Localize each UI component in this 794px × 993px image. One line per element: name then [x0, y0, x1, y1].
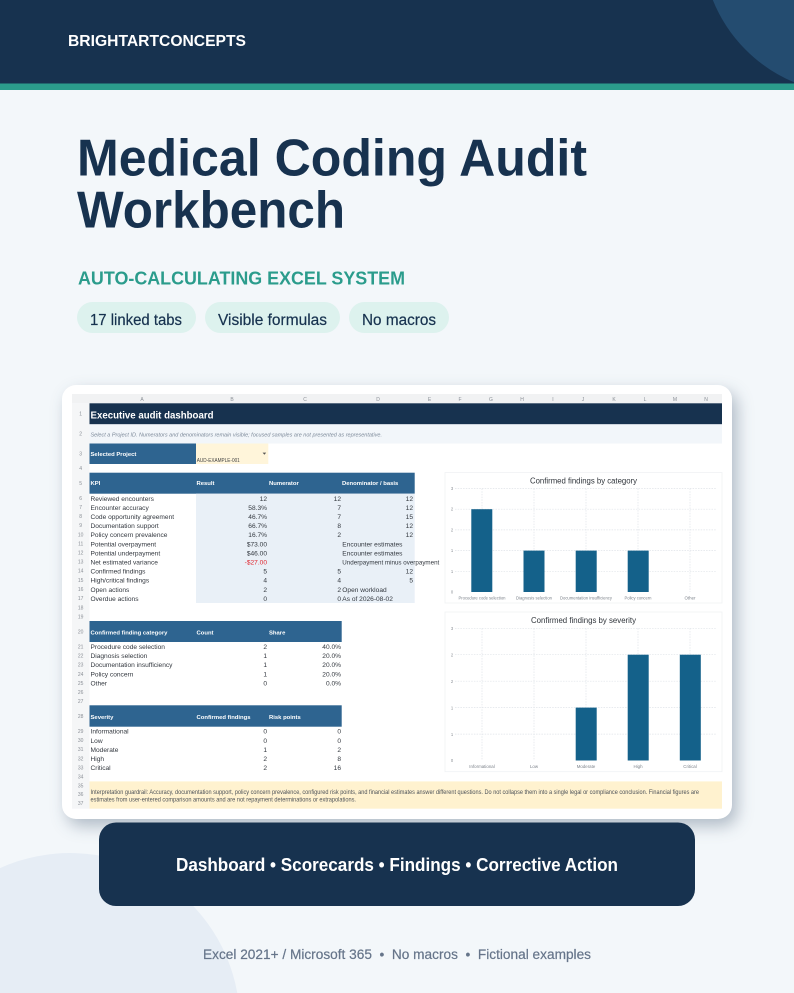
chart: findings by severity: 2 — [451, 679, 454, 684]
row numbers: 11 — [78, 541, 84, 547]
category table: Other — [90, 680, 108, 687]
row numbers: 4 — [79, 466, 82, 472]
category table: Count — [196, 630, 214, 636]
chart: findings by severity: 1 — [451, 732, 454, 737]
sheet title bar — [90, 403, 722, 424]
chart: findings by severity: High — [633, 764, 643, 769]
chart: findings by category: Other — [685, 596, 696, 600]
chart: findings by category: Procedure code selection — [458, 596, 506, 600]
chart: findings by severity: Moderate — [577, 764, 596, 769]
KPI table: 0 — [337, 596, 341, 603]
footer note: Excel 2021+ / Microsoft 365 • No macros • Fictional examples — [203, 947, 591, 962]
interpretation guardrail note — [90, 781, 722, 809]
column headers: A — [140, 397, 144, 403]
panel: spreadsheet card — [62, 385, 732, 819]
severity table: 0 — [263, 729, 267, 736]
column headers: F — [458, 397, 462, 403]
row numbers: 1 — [79, 412, 82, 418]
row numbers: 18 — [78, 606, 84, 612]
row numbers: 16 — [78, 587, 84, 593]
column headers: J — [582, 397, 585, 403]
chart: findings by severity — [445, 612, 722, 772]
category table: 1 — [263, 653, 267, 660]
severity table: 0 — [337, 729, 341, 736]
KPI table: 12 — [334, 496, 341, 503]
KPI table: KPI — [90, 481, 101, 487]
KPI table: Numerator — [269, 481, 299, 487]
severity table: 1 — [263, 747, 267, 754]
category table: 0.0% — [326, 680, 341, 687]
banner: feature list: Dashboard • Scorecards • Findings • Corrective Action — [176, 855, 618, 875]
row numbers: 17 — [78, 596, 84, 602]
row numbers: 23 — [78, 663, 84, 669]
severity table: High — [90, 756, 104, 763]
category table: 20.0% — [322, 671, 341, 678]
KPI table: 12 — [406, 569, 413, 576]
interpretation guardrail note: Interpretation guardrail: Accuracy, documentation support, policy concern prevalence, configured risk points, and financial estimates answer different questions. Do not collapse them into a single legal or compliance conclusion. Financial figures are — [90, 790, 700, 796]
chip: visible formulas: Visible formulas — [218, 312, 327, 329]
project selector: AUD-EXAMPLE-001 — [197, 458, 240, 464]
chip: linked tabs: 17 linked tabs — [90, 312, 182, 329]
KPI table: Open workload — [342, 587, 387, 594]
severity table: 0 — [263, 738, 267, 745]
chart: findings by severity: 0 — [451, 758, 454, 763]
row numbers: 24 — [78, 672, 84, 678]
header band — [0, 0, 794, 90]
severity table: 2 — [263, 756, 267, 763]
category table: Confirmed finding category — [90, 630, 168, 636]
KPI table: 4 — [263, 578, 267, 585]
column headers: G — [489, 397, 493, 403]
KPI table — [90, 473, 439, 603]
KPI table: Underpayment minus overpayment — [342, 560, 439, 566]
KPI table: 12 — [260, 496, 267, 503]
KPI table: As of 2026-08-02 — [342, 596, 393, 603]
row numbers: 25 — [78, 681, 84, 687]
row numbers: 9 — [79, 523, 82, 529]
row numbers: 7 — [79, 505, 82, 511]
chip: no macros — [349, 302, 449, 333]
KPI table: Net estimated variance — [90, 560, 158, 566]
row numbers: 32 — [78, 756, 84, 762]
severity table: Confirmed findings — [196, 715, 251, 721]
row numbers: 27 — [78, 699, 84, 705]
severity table: Critical — [90, 765, 111, 772]
KPI table: -$27.00 — [245, 560, 267, 566]
chart: findings by category: 1 — [451, 548, 454, 553]
category table — [90, 621, 342, 687]
KPI table: 2 — [337, 532, 341, 539]
KPI table: 12 — [406, 523, 413, 530]
KPI table: High/critical findings — [90, 578, 150, 585]
KPI table: Confirmed findings — [90, 569, 146, 576]
project selector: Selected Project — [90, 452, 136, 458]
chart: findings by category: Policy concern — [624, 596, 652, 600]
subtitle: AUTO-CALCULATING EXCEL SYSTEM — [78, 268, 405, 288]
KPI table: Encounter estimates — [342, 541, 403, 548]
chart: findings by category: 2 — [451, 527, 454, 532]
row numbers: 15 — [78, 578, 84, 584]
column headers: C — [303, 397, 307, 403]
row numbers: 13 — [78, 560, 84, 566]
project selector — [90, 444, 268, 464]
severity table: 2 — [337, 747, 341, 754]
KPI table: 15 — [406, 514, 413, 521]
KPI table: $46.00 — [247, 550, 267, 557]
row numbers: 10 — [78, 532, 84, 538]
KPI table: $73.00 — [247, 541, 267, 548]
category table: Share — [269, 630, 286, 636]
chart: findings by severity: Confirmed findings by severity — [531, 616, 636, 625]
KPI table: 2 — [337, 587, 341, 594]
KPI table: Overdue actions — [90, 596, 139, 603]
KPI table: 12 — [406, 496, 413, 503]
row numbers: 20 — [78, 630, 84, 636]
category table: 20.0% — [322, 662, 341, 669]
column headers: B — [230, 397, 234, 403]
interpretation guardrail note: estimates from user-entered comparison amounts and are not repayment determinations or extrapolations. — [90, 798, 356, 804]
title: Workbench — [77, 182, 345, 240]
banner: feature list — [99, 822, 695, 906]
KPI table: Code opportunity agreement — [90, 514, 174, 521]
KPI table: Potential underpayment — [90, 550, 160, 557]
column headers: N — [704, 397, 708, 403]
row numbers: 36 — [78, 792, 84, 798]
chart: findings by severity: Low — [530, 764, 539, 769]
row numbers — [78, 412, 84, 807]
column headers: E — [428, 397, 432, 403]
chart: findings by severity: 2 — [451, 652, 454, 657]
row numbers: 31 — [78, 747, 84, 753]
category table: 1 — [263, 671, 267, 678]
chart: findings by category: 3 — [451, 486, 454, 491]
KPI table: Encounter accuracy — [90, 505, 149, 512]
chart: findings by category: Diagnosis selection — [516, 596, 553, 600]
KPI table: 12 — [406, 532, 413, 539]
row numbers: 5 — [79, 481, 82, 487]
KPI table: 7 — [337, 505, 341, 512]
column headers — [72, 394, 722, 809]
KPI table: 66.7% — [248, 523, 267, 530]
KPI table: 5 — [263, 569, 267, 576]
sheet note: Select a Project ID. Numerators and denominators remain visible; focused samples are not presented as representative. — [90, 433, 382, 439]
category table: Procedure code selection — [90, 644, 165, 651]
KPI table: Documentation support — [90, 523, 159, 530]
KPI table: Reviewed encounters — [90, 496, 155, 503]
row numbers: 22 — [78, 654, 84, 660]
chart: findings by severity: 1 — [451, 705, 454, 710]
KPI table: 12 — [406, 505, 413, 512]
KPI table: 5 — [409, 578, 413, 585]
chart: findings by category: Confirmed findings by category — [530, 476, 637, 486]
row numbers: 28 — [78, 714, 84, 720]
severity table: Low — [90, 738, 103, 745]
severity table — [90, 705, 342, 772]
column headers: D — [376, 397, 380, 403]
row numbers: 33 — [78, 765, 84, 771]
column headers: H — [520, 397, 524, 403]
KPI table: 46.7% — [248, 514, 267, 521]
row numbers: 26 — [78, 690, 84, 696]
row numbers: 37 — [78, 801, 84, 807]
KPI table: 5 — [337, 569, 341, 576]
row numbers: 2 — [79, 432, 82, 438]
chart: findings by category: 2 — [451, 507, 454, 512]
row numbers: 35 — [78, 784, 84, 790]
KPI table: Encounter estimates — [342, 550, 403, 557]
KPI table: Policy concern prevalence — [90, 532, 168, 539]
severity table: Moderate — [90, 747, 119, 754]
chip: no macros: No macros — [362, 312, 436, 329]
column headers: M — [673, 397, 677, 403]
KPI table: 0 — [263, 596, 267, 603]
KPI table: 58.3% — [248, 505, 267, 512]
KPI table: Result — [196, 481, 215, 487]
column headers: K — [612, 397, 616, 403]
KPI table: 2 — [263, 587, 267, 594]
category table: 1 — [263, 662, 267, 669]
feature chips — [77, 302, 449, 333]
category table: 2 — [263, 644, 267, 651]
chart: findings by category: Documentation insufficiency — [560, 596, 613, 600]
chart: findings by category: 1 — [451, 569, 454, 574]
severity table: Risk points — [269, 715, 301, 721]
row numbers: 6 — [79, 496, 82, 502]
severity table: 2 — [263, 765, 267, 772]
row numbers: 29 — [78, 729, 84, 735]
KPI table: Open actions — [90, 587, 130, 594]
row numbers: 30 — [78, 738, 84, 744]
KPI table: 8 — [337, 523, 341, 530]
row numbers: 8 — [79, 514, 82, 520]
row numbers: 12 — [78, 550, 84, 556]
KPI table: Denominator / basis — [342, 481, 399, 487]
category table: Diagnosis selection — [90, 653, 148, 660]
severity table: 16 — [334, 765, 341, 772]
category table: 40.0% — [322, 644, 341, 651]
KPI table: 4 — [337, 578, 341, 585]
chip: linked tabs — [77, 302, 196, 333]
KPI table: 7 — [337, 514, 341, 521]
severity table: Severity — [90, 715, 114, 721]
column headers: L — [644, 397, 647, 403]
decorative circle: bottom left — [0, 853, 237, 993]
brand name: BRIGHTARTCONCEPTS — [68, 33, 246, 50]
severity table: Informational — [90, 729, 129, 736]
category table: Documentation insufficiency — [90, 662, 173, 669]
KPI table: Potential overpayment — [90, 541, 156, 548]
row numbers: 3 — [79, 452, 82, 458]
category table: 0 — [263, 680, 267, 687]
row numbers: 21 — [78, 644, 84, 650]
chip: visible formulas — [205, 302, 340, 333]
chart: findings by category: 0 — [451, 590, 454, 594]
chart: findings by category — [445, 472, 722, 603]
row numbers: 34 — [78, 774, 84, 780]
KPI table: 16.7% — [248, 532, 267, 539]
column headers: I — [552, 397, 554, 403]
sheet title bar: Executive audit dashboard — [90, 410, 214, 421]
chart: findings by severity: Critical — [683, 764, 697, 769]
chart: findings by severity: Informational — [469, 764, 495, 769]
severity table: 0 — [337, 738, 341, 745]
row numbers: 19 — [78, 614, 84, 620]
sheet note — [90, 424, 722, 444]
category table: 20.0% — [322, 653, 341, 660]
title — [77, 130, 587, 240]
chart: findings by severity: 3 — [451, 626, 454, 631]
row numbers: 14 — [78, 569, 84, 575]
title: Medical Coding Audit — [77, 130, 587, 188]
category table: Policy concern — [90, 671, 134, 678]
severity table: 8 — [337, 756, 341, 763]
